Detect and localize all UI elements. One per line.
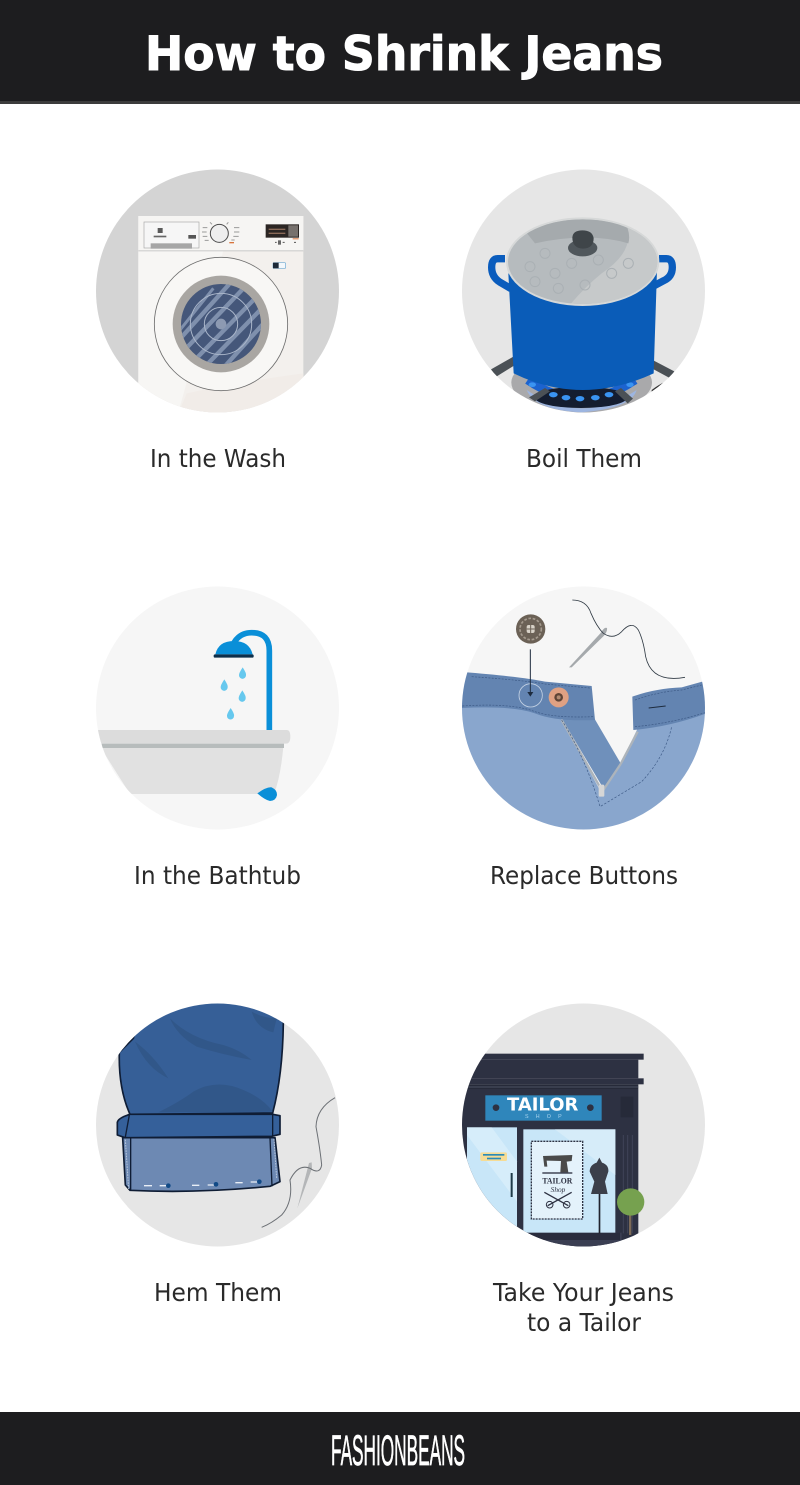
label: boil them: Boil Them: [526, 444, 642, 473]
icon: pot on gas burner: [462, 169, 705, 413]
footer band: FASHIONBEANS: [331, 1427, 465, 1475]
label: hem them: Hem Them: [154, 1278, 282, 1307]
footer band: [0, 1412, 800, 1485]
icon: tailor shop front: TAILOR: [542, 1177, 573, 1186]
icon: bathtub with shower: [90, 586, 339, 829]
label: replace buttons: Replace Buttons: [490, 861, 678, 890]
header band: [0, 0, 800, 104]
label: take your jeans to a tailor: to a Tailor: [527, 1308, 642, 1337]
icon: jeans waistband with button: [455, 586, 708, 837]
panel: boil them: [462, 169, 705, 473]
panel: take your jeans to a tailor: [455, 1003, 705, 1337]
icon: hemmed jeans leg with needle: [96, 995, 339, 1246]
icon: tailor shop front: SHOP: [525, 1114, 562, 1120]
icon: tailor shop front: TAILOR: [507, 1096, 578, 1116]
label: in the bathtub: In the Bathtub: [134, 861, 301, 890]
label: take your jeans to a tailor: [492, 1278, 674, 1337]
panel: replace buttons: [455, 586, 708, 890]
panel: in the bathtub: [90, 586, 339, 890]
label: take your jeans to a tailor: Take Your Jeans: [492, 1278, 674, 1307]
icon: tailor shop front: [455, 1003, 705, 1256]
panel: in the wash: [96, 169, 339, 473]
icon: washing machine: [96, 169, 339, 416]
label: in the wash: In the Wash: [150, 444, 286, 473]
title: How to Shrink Jeans: [145, 27, 663, 82]
icon: tailor shop front: Shop: [551, 1185, 566, 1194]
panel: hem them: [96, 995, 339, 1307]
